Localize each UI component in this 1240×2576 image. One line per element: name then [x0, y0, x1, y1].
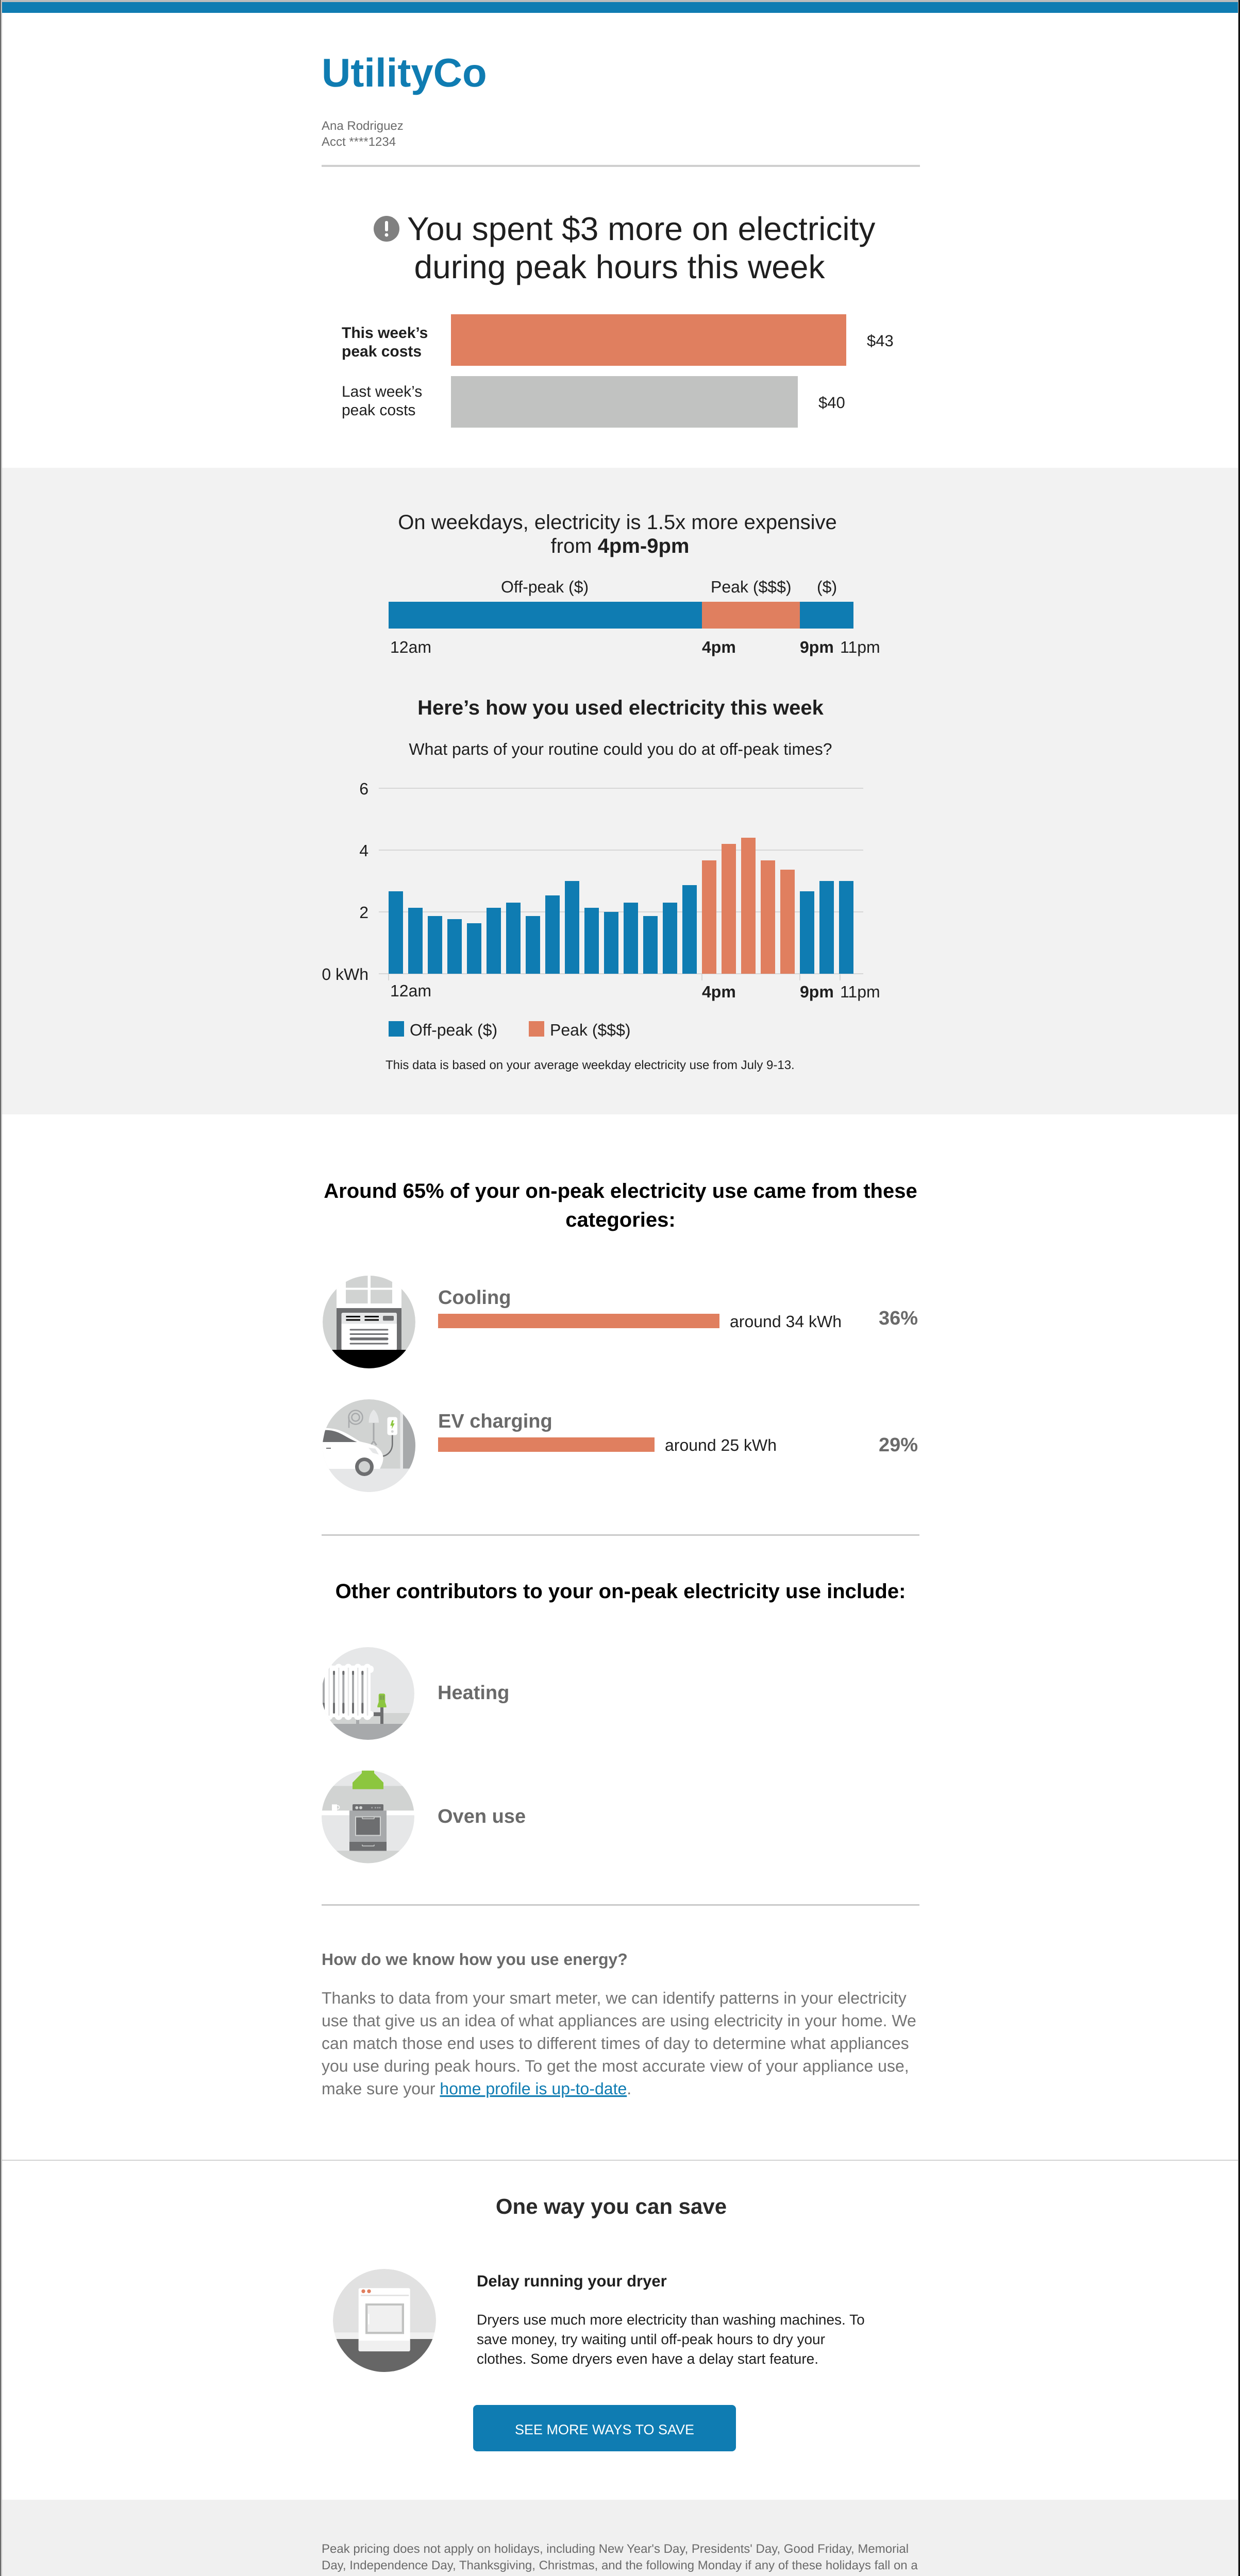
timeline: peak hours: 11pm: [840, 638, 880, 656]
bar chart: hourly electricity use: [322, 779, 880, 1001]
tip: delay running your dryer: [477, 2272, 865, 2367]
bar chart: hourly electricity use: 4pm: [702, 982, 736, 1001]
headline: during peak hours this week: [414, 248, 825, 285]
bar: this week's peak costs: $43: [867, 332, 894, 350]
logo: UtilityCo: UtilityCo: [322, 50, 487, 95]
tip: delay running your dryer: Dryers use much more electricity than washing machines. To: [477, 2312, 865, 2328]
bar: this week's peak costs: [342, 314, 894, 366]
text block: how we know: make sure your home profile is up-to-date.: [322, 2079, 631, 2098]
bar chart: hourly electricity use: 2: [359, 903, 368, 922]
panel: peak cost summary: [342, 210, 894, 428]
account holder details: Acct ****1234: [322, 135, 396, 149]
timeline: peak hours: Off-peak ($): [501, 578, 589, 596]
top accent bar: [2, 2, 1238, 13]
row: cooling: [438, 1287, 918, 1331]
bar chart: hourly electricity use: 11pm: [840, 982, 880, 1001]
bar chart: hourly electricity use: 9pm: [800, 982, 834, 1001]
text block: how we know: can match those end uses to different times of day to determine what appliances: [322, 2034, 909, 2053]
icon: EV charging: [323, 1399, 415, 1492]
label: heating: Heating: [438, 1682, 509, 1704]
icon: cooling air conditioner: [323, 1276, 415, 1368]
row: cooling: 36%: [879, 1308, 918, 1329]
row: EV charging: 29%: [879, 1434, 918, 1456]
row: cooling: Cooling: [438, 1287, 511, 1309]
panel: pricing and usage background: [2, 468, 1238, 1114]
text block: how we know: you use during peak hours. To get the most accurate view of your appliance use,: [322, 2057, 909, 2075]
footer: peak pricing notice: [322, 2542, 918, 2576]
heading: main on-peak categories: [324, 1180, 917, 1231]
timeline: peak hours: 4pm: [702, 638, 736, 656]
bar: this week's peak costs: peak costs: [342, 343, 422, 360]
timeline: peak hours: [389, 578, 880, 656]
bar: last week's peak costs: [342, 376, 845, 428]
timeline: peak hours: 9pm: [800, 638, 834, 656]
account holder details: [322, 119, 404, 149]
icon: dryer: [330, 2269, 439, 2375]
bar: this week's peak costs: This week’s: [342, 325, 428, 342]
bar chart: hourly electricity use: 0 kWh: [322, 965, 368, 984]
bar: last week's peak costs: $40: [818, 394, 845, 412]
account holder details: Ana Rodriguez: [322, 119, 404, 133]
bar chart: hourly electricity use: 4: [359, 841, 368, 860]
icon: alert: [374, 216, 399, 242]
timeline: peak hours: 12am: [390, 638, 431, 656]
bar chart: hourly electricity use: 12am: [390, 981, 431, 1000]
footer: peak pricing notice: Day, Independence Day, Thanksgiving, Christmas, and the following Monday if any of these holidays fall on a: [322, 2558, 918, 2572]
button: see more ways to save: SEE MORE WAYS TO SAVE: [515, 2422, 694, 2437]
chart legend: Off-peak ($): [410, 1021, 497, 1039]
heading: weekday pricing: [398, 511, 837, 557]
icon: heating radiator: [320, 1647, 417, 1742]
bar: last week's peak costs: peak costs: [342, 402, 415, 419]
heading: main on-peak categories: Around 65% of your on-peak electricity use came from these: [324, 1180, 917, 1202]
label: oven use: Oven use: [438, 1806, 526, 1827]
timeline: peak hours: Peak ($$$): [711, 578, 792, 596]
heading: main on-peak categories: categories:: [565, 1209, 676, 1231]
row: EV charging: EV charging: [438, 1411, 552, 1432]
heading: one way you can save: One way you can save: [496, 2194, 727, 2218]
panel: footer: [2, 2500, 1238, 2576]
row: EV charging: [438, 1411, 918, 1456]
button: see more ways to save: [473, 2405, 736, 2451]
tip: delay running your dryer: Delay running your dryer: [477, 2272, 667, 2290]
text block: how we know: use that give us an idea of what appliances are using electricity in your home. We: [322, 2011, 916, 2030]
headline: You spent $3 more on electricity: [407, 210, 875, 247]
footer: peak pricing notice: Peak pricing does not apply on holidays, including New Year's Day, Presidents' Day, Good Friday, Memorial: [322, 2542, 909, 2556]
chart footnote: This data is based on your average weekday electricity use from July 9-13.: [386, 1058, 795, 1072]
subheading: routine question: What parts of your routine could you do at off-peak times?: [409, 740, 832, 758]
chart legend: [389, 1021, 631, 1039]
chart legend: Peak ($$$): [550, 1021, 631, 1039]
row: cooling: around 34 kWh: [730, 1312, 842, 1331]
heading: usage this week: Here’s how you used electricity this week: [417, 697, 824, 719]
text block: how we know: Thanks to data from your smart meter, we can identify patterns in your electricity: [322, 1989, 907, 2007]
tip: delay running your dryer: clothes. Some dryers even have a delay start feature.: [477, 2351, 818, 2367]
header: logo and account: [322, 50, 487, 149]
bar: last week's peak costs: Last week’s: [342, 383, 422, 400]
text block: how we know: [322, 1950, 916, 2098]
tip: delay running your dryer: save money, try waiting until off-peak hours to dry your: [477, 2331, 825, 2347]
bar chart: hourly electricity use: 6: [359, 779, 368, 798]
heading: weekday pricing: from 4pm-9pm: [551, 535, 689, 557]
row: EV charging: around 25 kWh: [665, 1436, 777, 1454]
headline: [407, 210, 875, 285]
icon: oven: [320, 1770, 417, 1866]
heading: other contributors: Other contributors to your on-peak electricity use include:: [336, 1580, 906, 1603]
heading: weekday pricing: On weekdays, electricity is 1.5x more expensive: [398, 511, 837, 534]
text block: how we know: How do we know how you use energy?: [322, 1950, 628, 1969]
timeline: peak hours: ($): [817, 578, 837, 596]
